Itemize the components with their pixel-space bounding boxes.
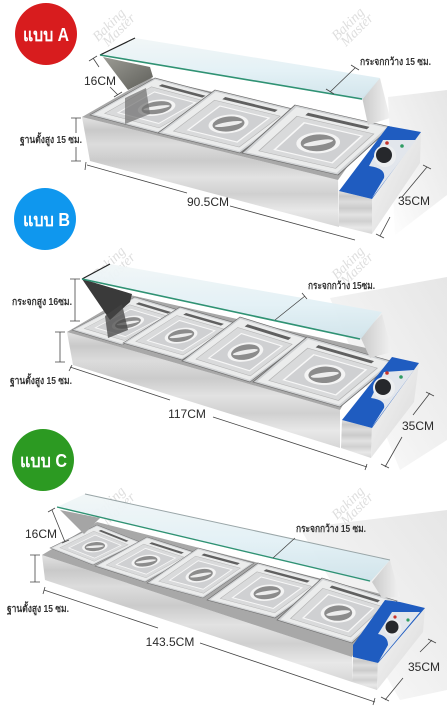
watermarks: Baking <box>329 244 368 283</box>
watermarks: Master <box>100 250 139 290</box>
machine B: four pans <box>67 264 419 458</box>
dimensions: machine B: กระจกสูง 16ซม. <box>12 297 72 309</box>
dimensions: machine B: 117CM <box>168 407 206 421</box>
dimensions: machine B: ฐานตั้งสูง 15 ซม. <box>10 373 72 388</box>
dimensions: machine C: ฐานตั้งสูง 15 ซม. <box>7 601 69 616</box>
dimensions: machine B: กระจกกว้าง 15ซม. <box>308 280 375 292</box>
machine C: five pans <box>42 494 425 690</box>
watermarks: Baking <box>90 6 129 45</box>
watermarks: Master <box>338 490 377 530</box>
badge: แบบ A <box>15 3 77 65</box>
watermarks: Master <box>100 490 139 530</box>
dimensions: machine C: 16CM <box>25 527 57 541</box>
dimensions: machine A: กระจกกว้าง 15 ซม. <box>360 56 431 68</box>
watermarks: Master <box>338 11 377 51</box>
badge: แบบ C <box>12 429 74 491</box>
watermarks: Master <box>100 11 139 51</box>
watermarks: Baking <box>329 5 368 44</box>
dimensions: machine A: 16CM <box>84 74 116 88</box>
machine A: three pans <box>82 38 421 234</box>
dimensions: machine A: 90.5CM <box>187 195 229 209</box>
dimensions: machine B: 35CM <box>402 419 434 433</box>
badge: แบบ B <box>14 188 76 250</box>
badge: แบบ B: แบบ B <box>23 210 70 230</box>
badge: แบบ A: แบบ A <box>23 25 69 45</box>
dimensions: machine A: ฐานตั้งสูง 15 ซม. <box>20 132 82 147</box>
dimensions: machine B <box>10 279 434 470</box>
dimensions: machine C: กระจกกว้าง 15 ซม. <box>296 523 366 535</box>
dimensions: machine C <box>7 508 440 705</box>
watermarks: Baking <box>90 244 129 283</box>
watermarks: Master <box>338 250 377 290</box>
badge: แบบ C: แบบ C <box>20 451 67 471</box>
dimensions: machine C: 35CM <box>408 660 440 674</box>
background shadows <box>300 90 447 700</box>
dimensions: machine C: 143.5CM <box>146 635 194 649</box>
watermarks <box>90 5 377 530</box>
watermarks: Baking <box>329 484 368 523</box>
dimensions: machine A <box>20 56 431 240</box>
dimensions: machine A: 35CM <box>398 194 430 208</box>
watermarks: Baking <box>90 484 129 523</box>
